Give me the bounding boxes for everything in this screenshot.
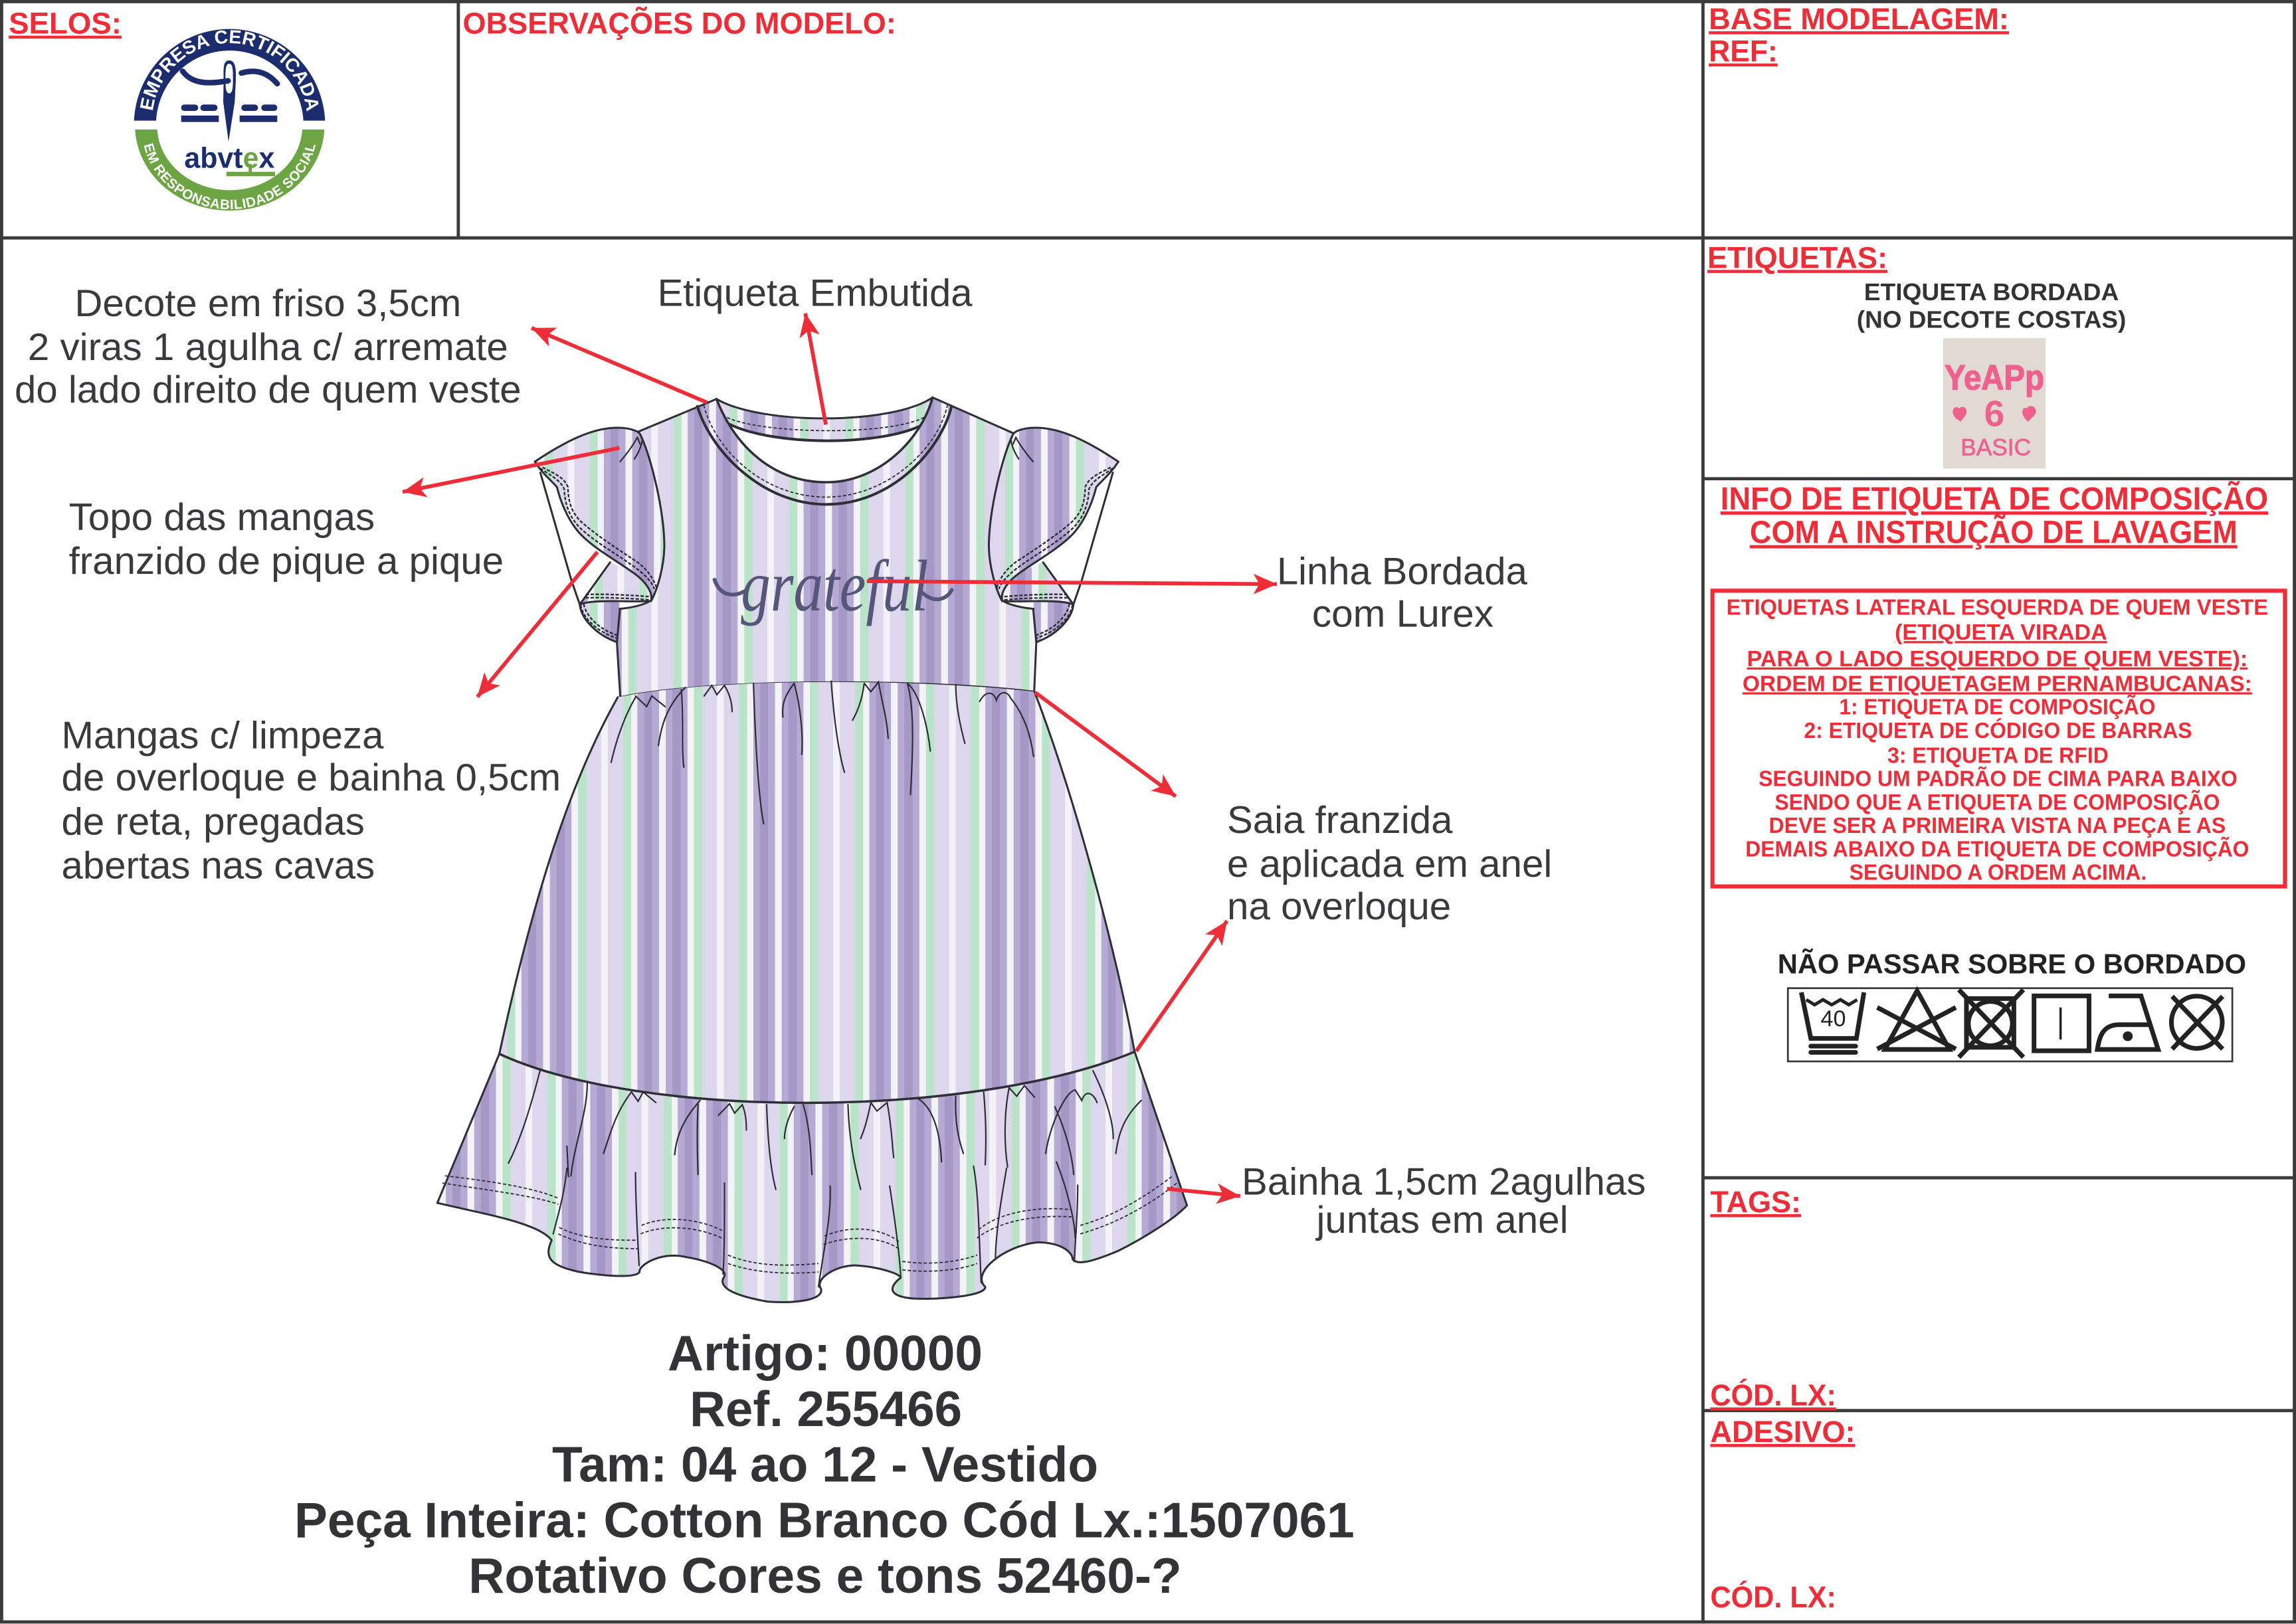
- article information block: Ref. 255466: [690, 1381, 962, 1437]
- arrow: decote: [531, 328, 708, 403]
- callout: ordem de etiquetagem: PARA O LADO ESQUERDO DE QUEM VESTE):: [1747, 647, 2248, 672]
- annotation: bainha: Bainha 1,5cm 2agulhas: [1242, 1161, 1646, 1204]
- text: não passar sobre o bordado: NÃO PASSAR SOBRE O BORDADO: [1778, 948, 2246, 980]
- arrow: linha bordada: [867, 581, 1277, 584]
- callout: ordem de etiquetagem: [1713, 590, 2285, 887]
- annotation: mangas: de overloque e bainha 0,5cm: [62, 757, 561, 799]
- dress illustration: [290, 366, 1715, 1332]
- annotation: topo das mangas: franzido de pique a pique: [69, 540, 504, 583]
- panel: tags: [1710, 1185, 1836, 1412]
- article information block: Peça Inteira: Cotton Branco Cód Lx.:1507061: [294, 1492, 1355, 1548]
- annotation: saia franzida: Saia franzida: [1227, 799, 1453, 842]
- embroidered label: 6: [1984, 393, 2004, 434]
- annotation: mangas: [62, 714, 561, 887]
- left lower under sleeve: [539, 472, 620, 643]
- annotation: topo das mangas: [69, 496, 504, 583]
- skirt ruffle: [436, 1051, 1188, 1303]
- article information block: Tam: 04 ao 12 - Vestido: [552, 1437, 1098, 1492]
- text: etiqueta bordada: [1857, 278, 2126, 333]
- icon: abvtex certification seal: abvtex: [184, 141, 275, 174]
- heading: tags: TAGS:: [1710, 1185, 1801, 1219]
- annotation: mangas: de reta, pregadas: [62, 800, 365, 843]
- skirt: [498, 680, 1136, 1102]
- embroidery: grateful: grateful: [741, 545, 928, 626]
- care symbols strip: 40: [1821, 1006, 1846, 1032]
- arrow: mangas: [478, 552, 597, 697]
- text: etiqueta bordada: (NO DECOTE COSTAS): [1857, 306, 2126, 333]
- callout: ordem de etiquetagem: DEVE SER A PRIMEIRA VISTA NA PEÇA E AS: [1769, 814, 2226, 838]
- arrow: aplicada em anel: [1136, 921, 1227, 1051]
- panel: etiquetas: [1707, 240, 2126, 468]
- heading: info de etiqueta: COM A INSTRUÇÃO DE LAVAGEM: [1750, 514, 2238, 551]
- text: etiqueta bordada: ETIQUETA BORDADA: [1864, 278, 2119, 306]
- embroidered label: YeAPp: [1945, 358, 2044, 397]
- panel: adesivo: [1710, 1415, 1856, 1614]
- bodice: [616, 396, 1038, 697]
- icon: abvtex certification seal: EM RESPONSABILIDADE SOCIAL: [144, 143, 316, 209]
- left sleeve: [533, 426, 666, 602]
- heading: ref: REF:: [1709, 35, 1778, 68]
- heading: info de etiqueta: [1721, 480, 2268, 551]
- annotation: saia franzida: e aplicada em anel: [1227, 843, 1552, 885]
- heading: etiquetas: ETIQUETAS:: [1707, 240, 1887, 274]
- callout: ordem de etiquetagem: 1: ETIQUETA DE COMPOSIÇÃO: [1839, 695, 2155, 720]
- callout: ordem de etiquetagem: 3: ETIQUETA DE RFID: [1887, 743, 2109, 768]
- annotation: linha bordada: Linha Bordada: [1277, 550, 1527, 592]
- article information block: Artigo: 00000: [668, 1325, 983, 1381]
- annotation: mangas: abertas nas cavas: [62, 844, 375, 887]
- left sleeve flap: [579, 561, 651, 610]
- heading: adesivo: ADESIVO:: [1710, 1415, 1856, 1449]
- arrow: etiqueta embutida: [805, 314, 826, 424]
- panel: selos: [9, 7, 326, 211]
- callout: ordem de etiquetagem: DEMAIS ABAIXO DA ETIQUETA DE COMPOSIÇÃO: [1745, 836, 2249, 861]
- article information block: [294, 1325, 1355, 1603]
- label: cód lx adesivo: CÓD. LX:: [1710, 1580, 1836, 1614]
- article information block: Rotativo Cores e tons 52460-?: [468, 1548, 1182, 1603]
- callout: ordem de etiquetagem: ETIQUETAS LATERAL ESQUERDA DE QUEM VESTE: [1727, 596, 2268, 620]
- right lower under sleeve: [1034, 472, 1114, 643]
- icon: abvtex certification seal: [134, 29, 326, 211]
- annotation: bainha: [1242, 1161, 1646, 1241]
- heading: base modelagem: BASE MODELAGEM:: [1709, 2, 2009, 36]
- panel: composição: [1713, 480, 2285, 1061]
- annotation: decote: Decote em friso 3,5cm: [74, 282, 461, 325]
- annotation: saia franzida: [1227, 799, 1552, 928]
- heading: info de etiqueta: INFO DE ETIQUETA DE COMPOSIÇÃO: [1721, 480, 2268, 517]
- annotation: saia franzida: na overloque: [1227, 885, 1451, 928]
- embroidered label: BASIC: [1961, 434, 2031, 460]
- callout: ordem de etiquetagem: SENDO QUE A ETIQUETA DE COMPOSIÇÃO: [1774, 790, 2220, 815]
- back neck band: [716, 396, 933, 442]
- callout: ordem de etiquetagem: SEGUINDO A ORDEM ACIMA.: [1850, 861, 2147, 885]
- right sleeve flap: [1003, 561, 1075, 610]
- annotation: decote: 2 viras 1 agulha c/ arremate: [28, 326, 508, 369]
- annotation: linha bordada: [1277, 550, 1527, 635]
- annotation: topo das mangas: Topo das mangas: [69, 496, 375, 539]
- callout: ordem de etiquetagem: ORDEM DE ETIQUETAGEM PERNAMBUCANAS:: [1743, 672, 2252, 696]
- callout: ordem de etiquetagem: 2: ETIQUETA DE CÓDIGO DE BARRAS: [1804, 718, 2192, 743]
- care symbols strip: [1788, 988, 2232, 1061]
- arrow: topo das mangas: [403, 448, 619, 492]
- annotation: decote: do lado direito de quem veste: [15, 369, 522, 411]
- arrow: bainha: [1167, 1189, 1240, 1196]
- callout: ordem de etiquetagem: (ETIQUETA VIRADA: [1895, 620, 2107, 645]
- embroidered label: [1943, 338, 2046, 468]
- icon: abvtex certification seal: EMPRESA CERTIFICADA: [140, 30, 319, 112]
- right sleeve: [987, 426, 1119, 602]
- annotation: mangas: Mangas c/ limpeza: [62, 714, 384, 757]
- label: cód lx tags: CÓD. LX:: [1710, 1378, 1836, 1412]
- heading: selos: SELOS:: [9, 7, 122, 41]
- arrow: saia franzida: [1035, 693, 1176, 796]
- annotation: linha bordada: com Lurex: [1312, 592, 1494, 635]
- annotation: bainha: juntas em anel: [1315, 1199, 1569, 1241]
- heading: observações do modelo: OBSERVAÇÕES DO MODELO:: [462, 7, 896, 41]
- annotation: decote: [15, 282, 522, 411]
- annotation: etiqueta embutida: Etiqueta Embutida: [658, 272, 973, 315]
- callout: ordem de etiquetagem: SEGUINDO UM PADRÃO DE CIMA PARA BAIXO: [1759, 767, 2238, 792]
